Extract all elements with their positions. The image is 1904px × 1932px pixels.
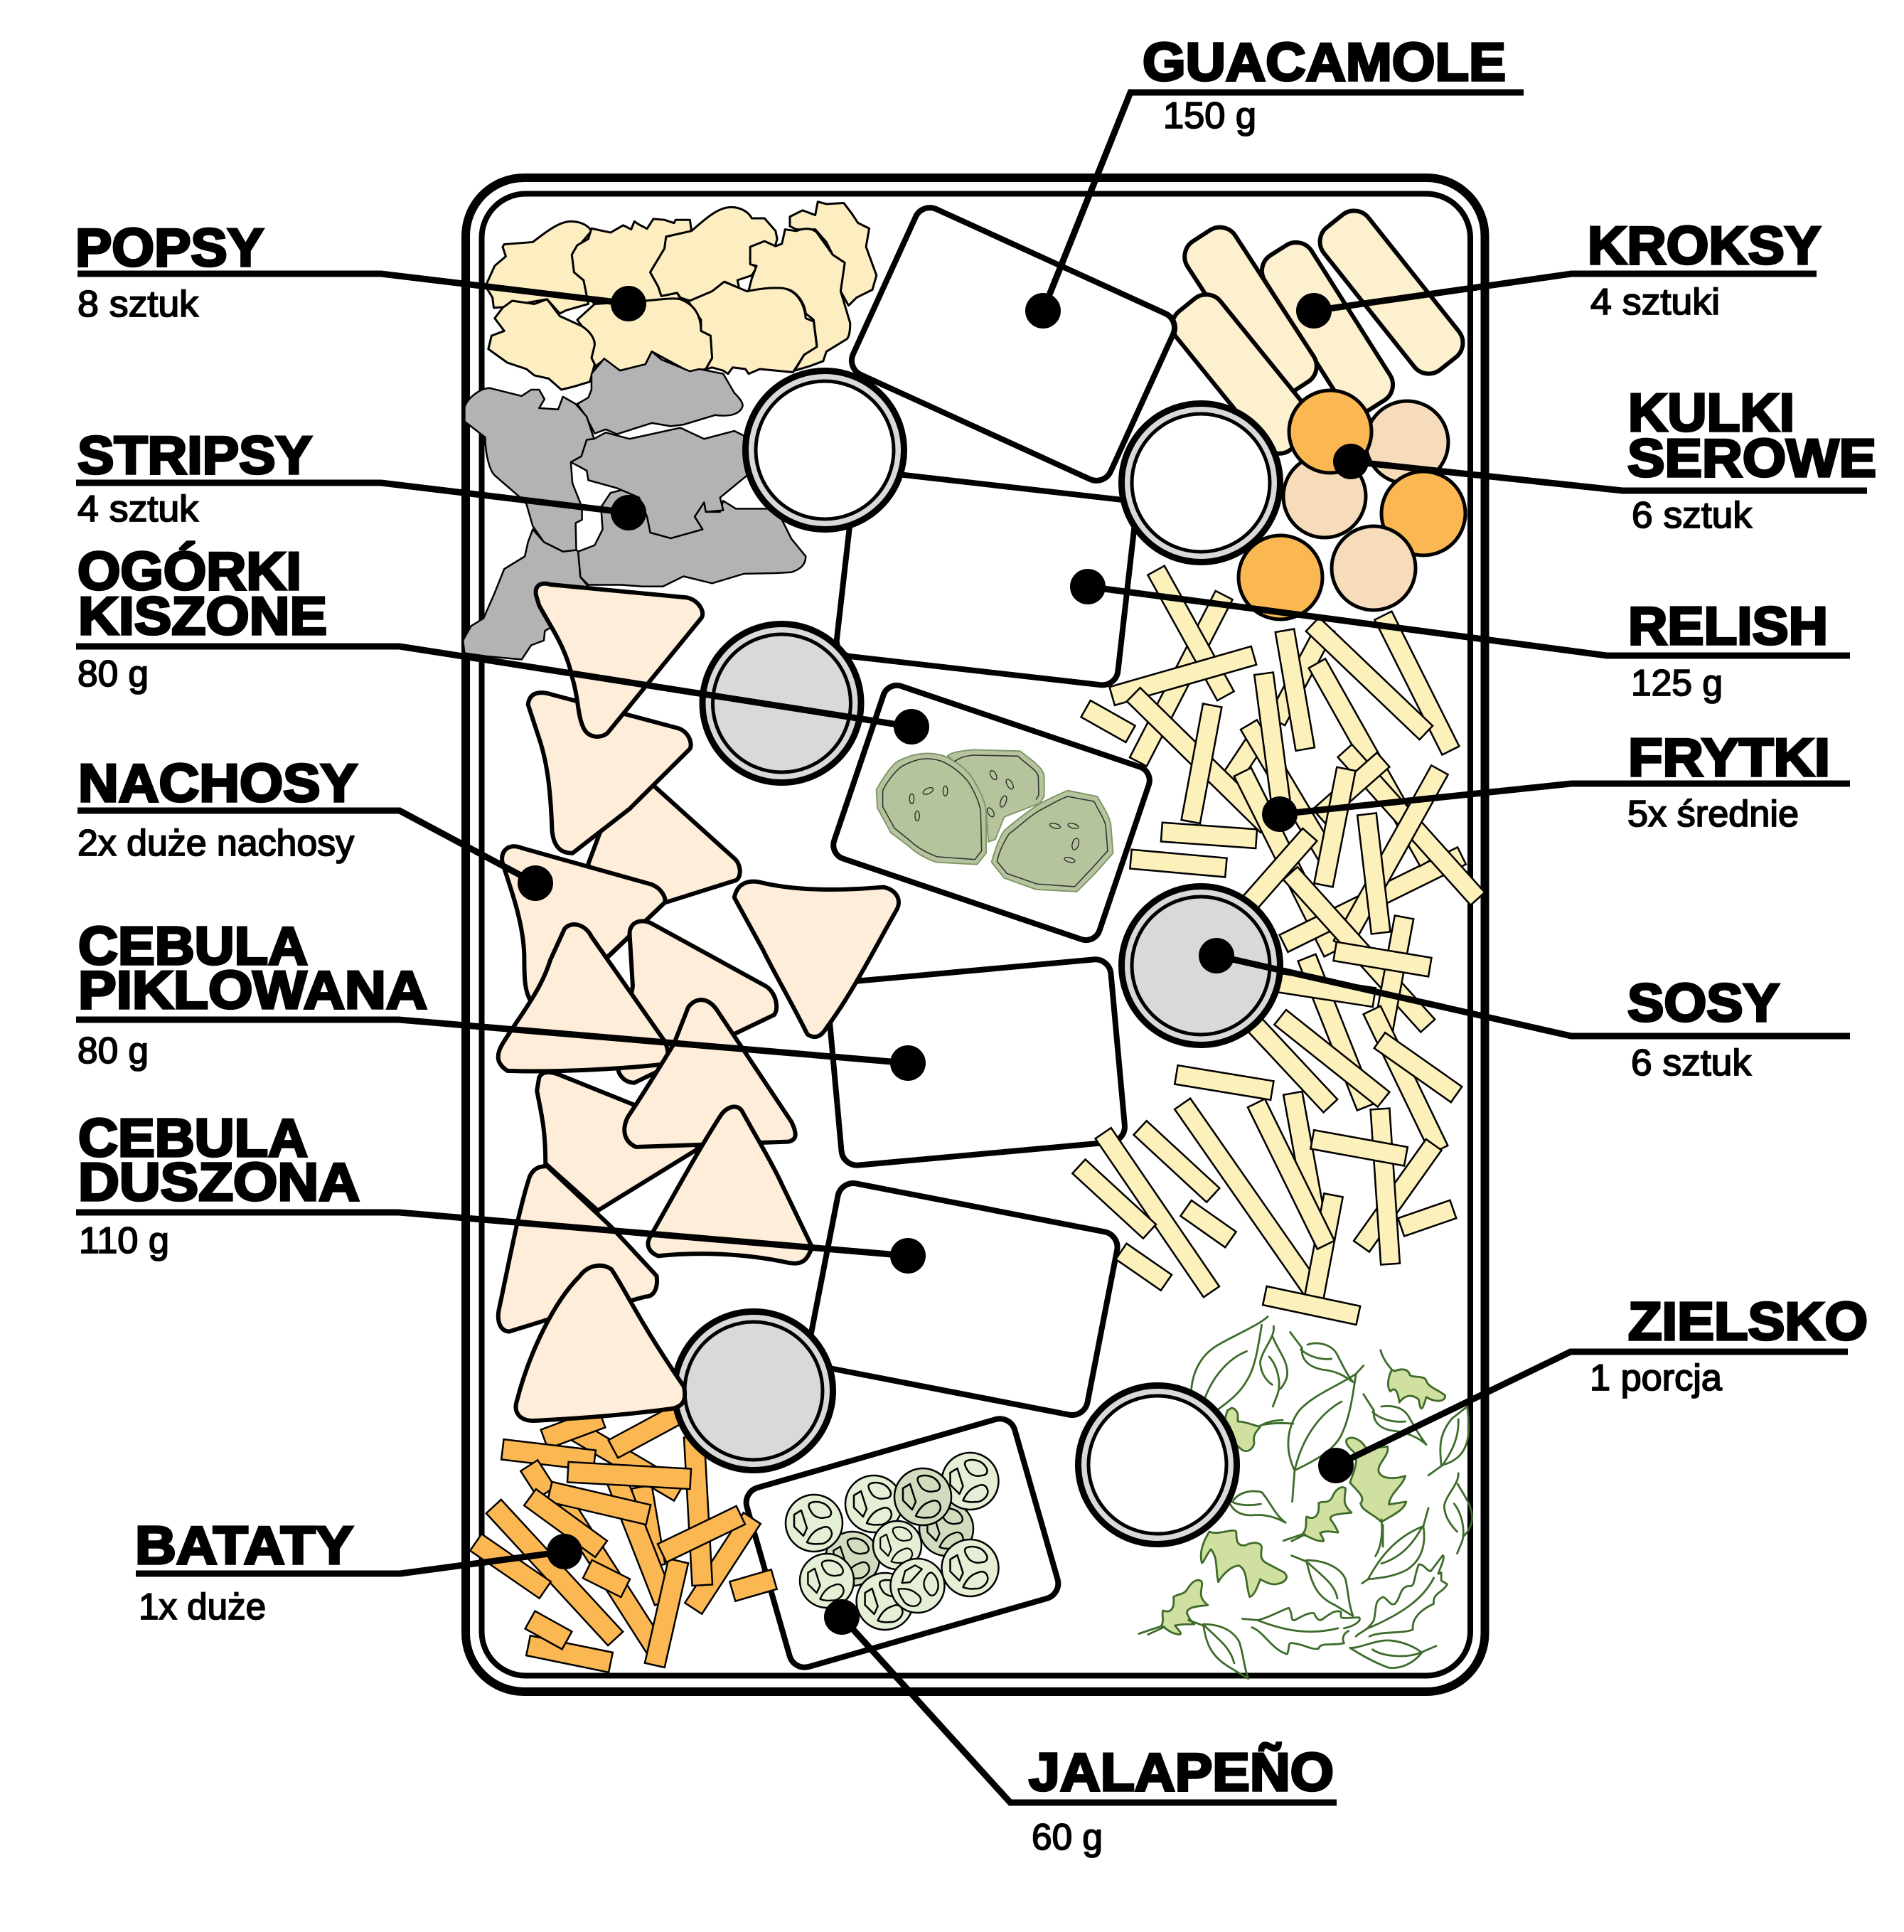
label: kroksy: KROKSY [1588,215,1821,275]
label: stripsy [76,425,646,530]
sauce bowl: white, top left [745,371,904,529]
label: frytki: 5x średnie [1627,794,1799,835]
label: kulki serowe: SEROWE [1627,428,1876,488]
label: guacamole: GUACAMOLE [1143,32,1506,92]
board: guacamole [847,203,1180,486]
label: relish: RELISH [1628,596,1828,656]
label: popsy: POPSY [75,218,264,277]
label: kroksy: 4 sztuki [1590,282,1720,323]
label: sosy: SOSY [1627,973,1780,1032]
label: guacamole [1025,32,1524,329]
board: ogórki kiszone [830,682,1153,944]
sauce bowl: white, top right [1122,404,1280,562]
stripsy: gray chicken strips [463,351,806,659]
label: relish [1070,569,1850,704]
label: kulki serowe: KULKI [1628,383,1795,442]
label: bataty: 1x duże [139,1586,266,1628]
label: zielsko: ZIELSKO [1628,1291,1868,1351]
label: bataty [135,1515,582,1628]
label: cebula duszona [76,1108,926,1274]
sauce bowl: gray, lower left [674,1311,833,1471]
board: cebula piklowana [826,958,1126,1167]
label: jalapeño: JALAPEÑO [1029,1742,1334,1802]
label: cebula duszona: CEBULA [78,1108,308,1168]
tray: double rounded outline [466,178,1485,1692]
label: kulki serowe [1333,383,1876,536]
label: jalapeño: 60 g [1032,1817,1103,1858]
label: nachosy [77,753,553,901]
label: ogórki kiszone: OGÓRKI [77,541,301,601]
label: frytki [1262,727,1850,835]
board: jalapeño [742,1415,1062,1671]
ogórki kiszone: three pickle slices [877,749,1113,892]
label: bataty: BATATY [135,1515,353,1575]
label: nachosy: 2x duże nachosy [77,823,354,864]
label: cebula duszona: DUSZONA [78,1152,360,1212]
label: kroksy [1296,215,1821,329]
zielsko: salad leaves [1139,1317,1472,1679]
label: ogórki kiszone: KISZONE [78,586,327,646]
label: nachosy: NACHOSY [78,753,358,813]
label: jalapeño [824,1599,1337,1858]
popsy: cream popcorn pieces [487,202,877,390]
label: cebula piklowana: PIKLOWANA [78,960,427,1020]
kulki serowe: six cheese balls [1239,390,1465,619]
label: ogórki kiszone [76,541,929,744]
label: cebula piklowana [76,916,926,1081]
label: relish: 125 g [1631,663,1723,704]
jalapeño: pickled pepper slices [786,1453,998,1630]
label: frytki: FRYTKI [1628,727,1830,787]
label: guacamole: 150 g [1163,95,1256,137]
kroksy: four croquette sticks [1165,203,1470,461]
label: cebula duszona: 110 g [79,1220,169,1261]
batata fries [484,1419,764,1660]
label: popsy [75,218,646,325]
board: relish [835,469,1138,687]
label: sosy [1199,938,1850,1084]
label: cebula piklowana: CEBULA [78,916,308,976]
label: stripsy: 4 sztuk [77,489,199,530]
label: cebula piklowana: 80 g [77,1030,149,1072]
label: zielsko: 1 porcja [1590,1357,1722,1399]
sauce bowl: gray, right middle [1122,886,1280,1045]
label: stripsy: STRIPSY [77,425,312,485]
label: popsy: 8 sztuk [77,284,199,325]
label: zielsko [1318,1291,1868,1483]
sauce bowl: white, lower right [1078,1385,1237,1544]
label: kulki serowe: 6 sztuk [1632,495,1753,536]
sauce bowl: gray, upper middle [702,624,861,782]
nachos: tortilla chips [498,584,899,1421]
board: cebula duszona [806,1180,1120,1418]
label: sosy: 6 sztuk [1631,1042,1752,1084]
frytki: pile of french fries [1086,579,1471,1313]
label: ogórki kiszone: 80 g [77,653,149,695]
